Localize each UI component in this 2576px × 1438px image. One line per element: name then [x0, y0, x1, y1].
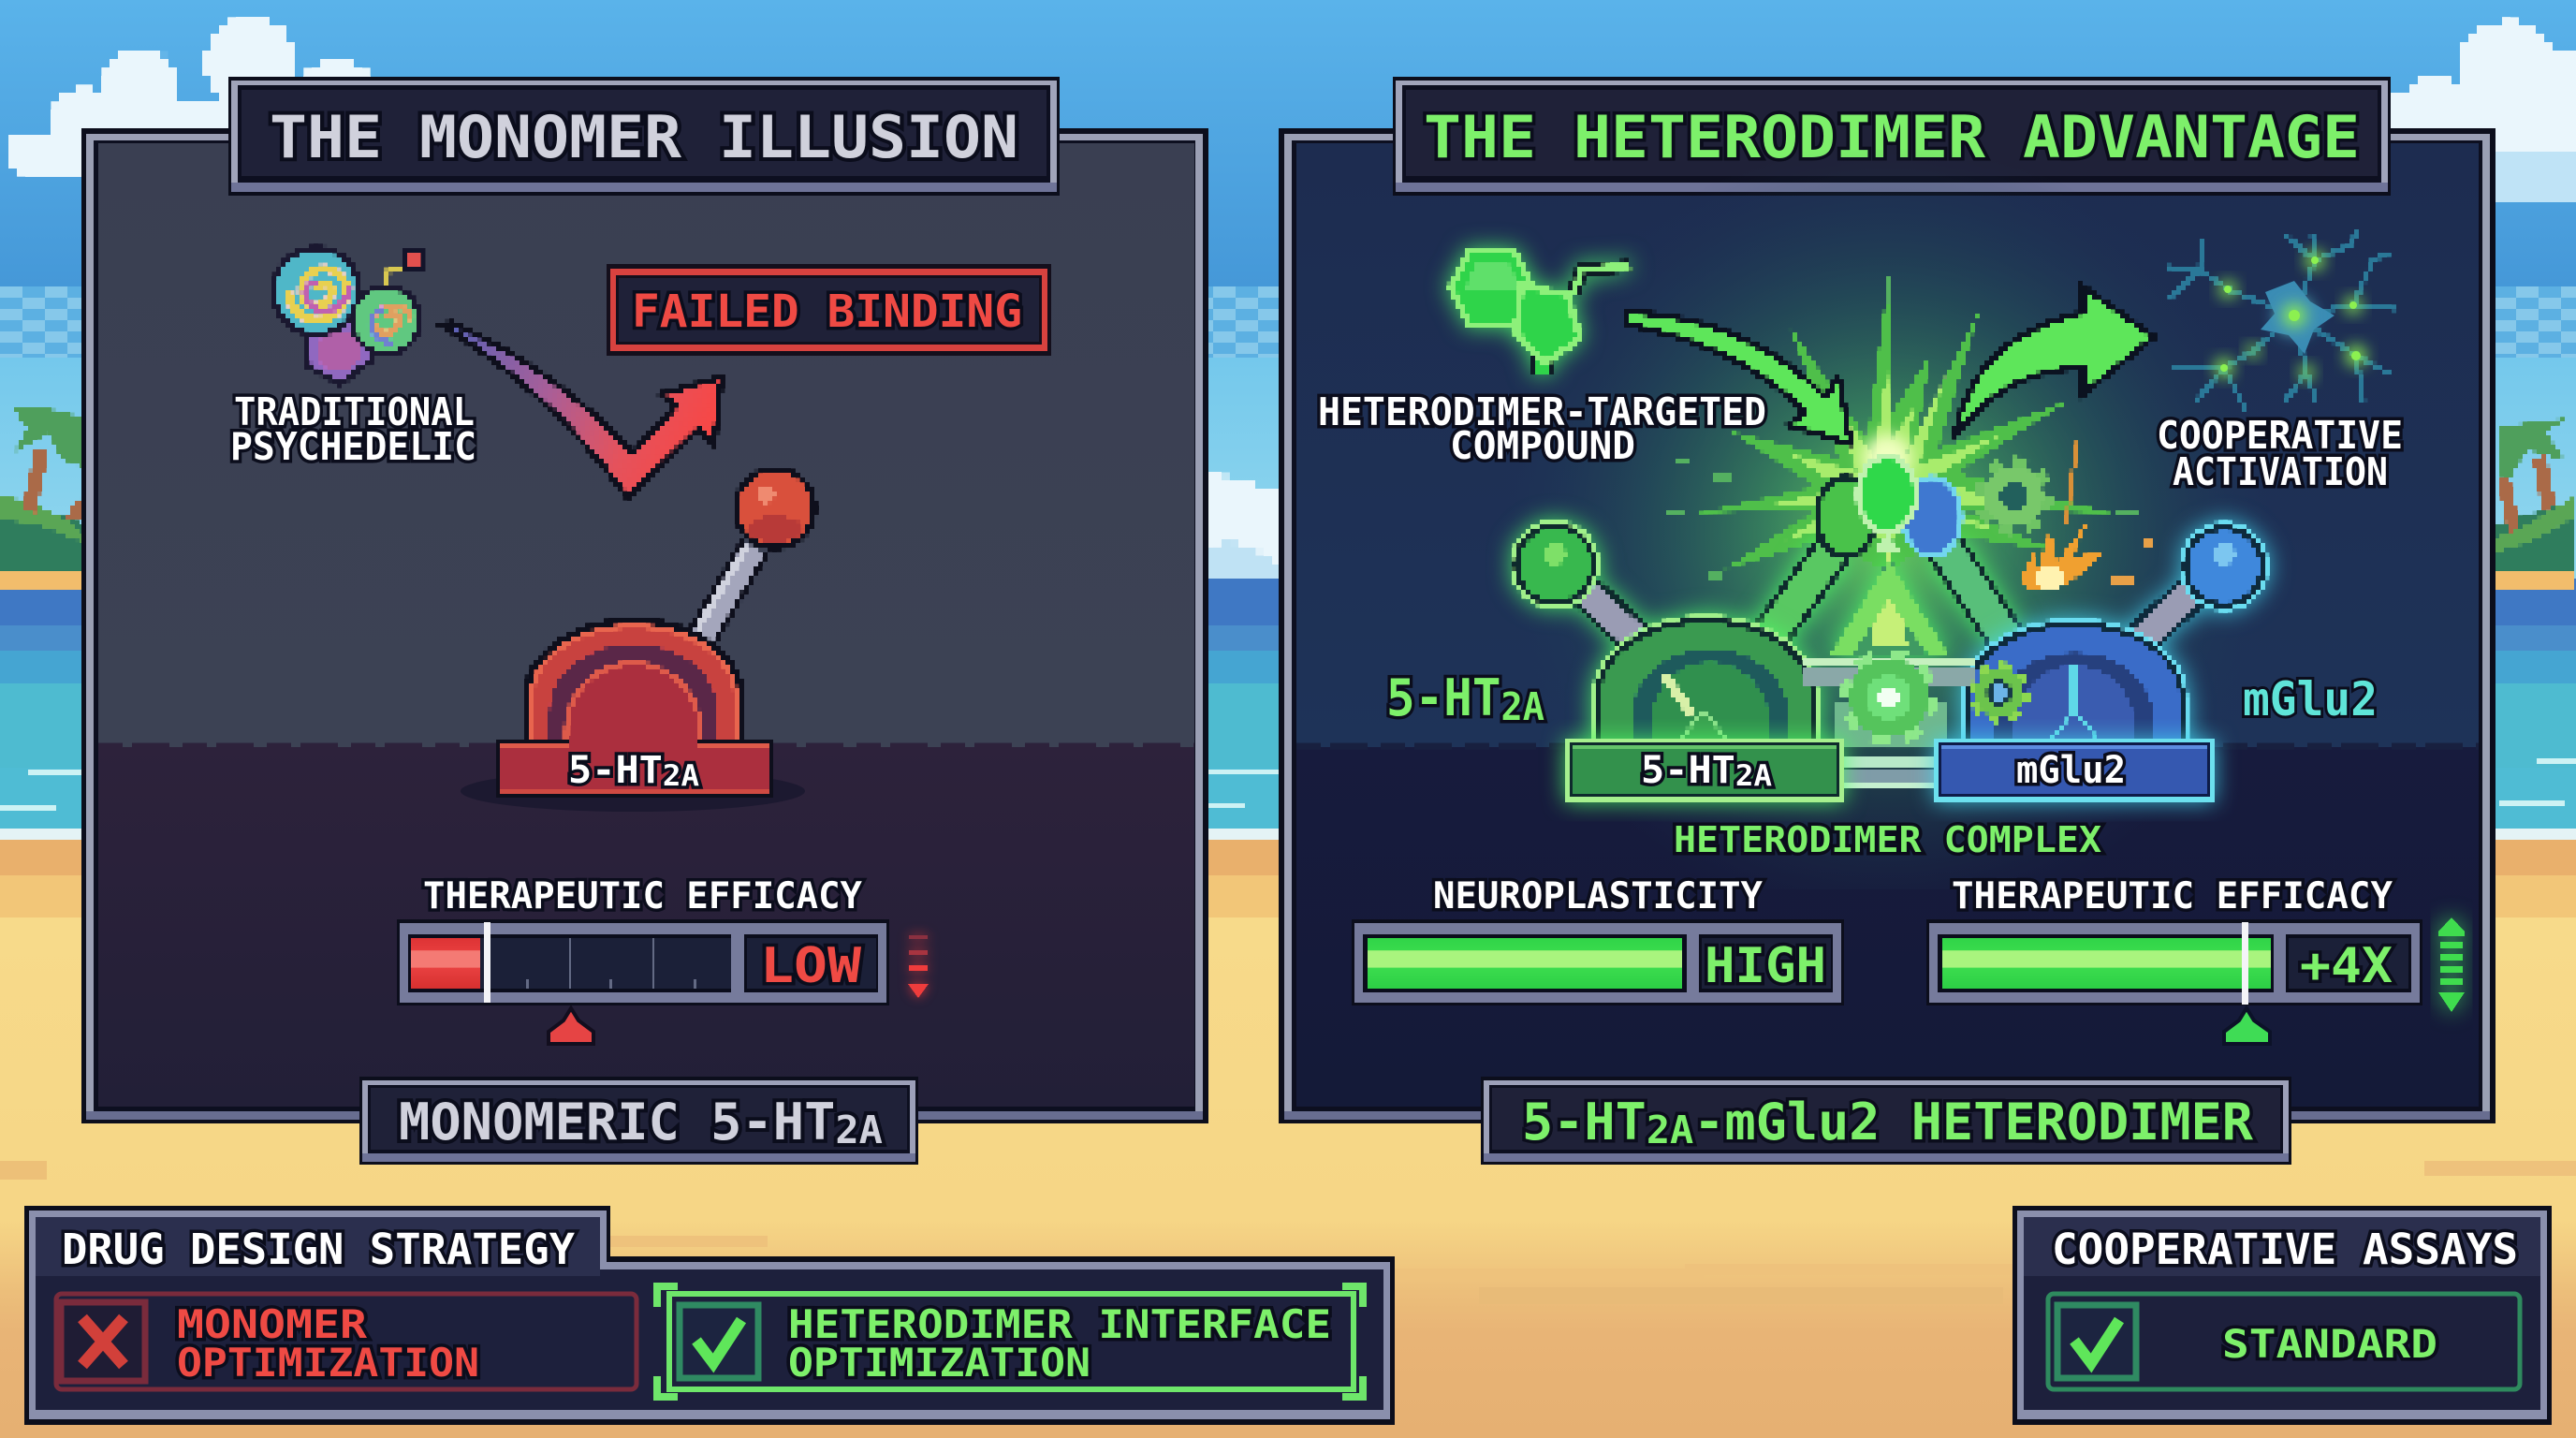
- panel frame: [1279, 128, 2496, 1123]
- panel footer: 5-HT2A-mGlu2 heterodimer: 2A: [1647, 1108, 1694, 1152]
- binding site: [1817, 457, 2047, 556]
- icon: red lever, 5-HT2A receptor: [461, 469, 814, 812]
- sand: [0, 840, 2576, 1438]
- right lever blue: [1967, 523, 2267, 744]
- marker: green pointer: [2224, 1008, 2270, 1044]
- gauge value: LOW: [760, 938, 862, 994]
- panel footer: monomeric 5-HT2A: MONOMERIC 5-HT: [399, 1093, 825, 1152]
- panel: drug design strategy: [24, 1206, 1395, 1425]
- option text: MONOMER: [177, 1301, 368, 1347]
- panel title: the monomer illusion: THE MONOMER ILLUSION: [270, 103, 1018, 171]
- option: standard: [2048, 1294, 2520, 1389]
- indicator: rising green dashes: [2438, 917, 2465, 1012]
- panel: the heterodimer advantage: [1279, 77, 2496, 1165]
- base text: mGlu2: mGlu2: [2016, 749, 2126, 792]
- sky: [0, 0, 2576, 582]
- panel footer: 5-HT2A-mGlu2 heterodimer: 5-HT: [1522, 1093, 1644, 1152]
- gauge: high neuroplasticity: [1352, 919, 1844, 1005]
- gauge value: +4X: [2300, 938, 2393, 994]
- option text: [788, 1301, 1331, 1386]
- arrow: deflected binding attempt: [442, 323, 722, 498]
- option text: [177, 1301, 479, 1386]
- option text: OPTIMIZATION: [177, 1340, 479, 1386]
- icon: activated neuron: [2167, 229, 2396, 412]
- label: mGlu2 right: mGlu2: [2243, 672, 2378, 726]
- gauge value: HIGH: [1705, 938, 1826, 994]
- glow: central activation: [1494, 150, 2280, 889]
- clouds: [7, 17, 2576, 579]
- option: monomer optimization (rejected): [56, 1294, 637, 1389]
- panel footer: 5-HT2A-mGlu2 heterodimer: -mGlu2 HETERODIMER: [1693, 1093, 2253, 1152]
- icon: heterodimer-targeted compound molecule: [1451, 251, 1631, 374]
- base: mGlu2: [1934, 739, 2215, 802]
- neuron body: [2261, 281, 2334, 354]
- islands and palm trees: [0, 406, 2576, 592]
- corner brackets: [657, 1286, 1363, 1397]
- base text: 5-HT2A: 2A: [1735, 759, 1772, 793]
- option text: OPTIMIZATION: [788, 1340, 1090, 1386]
- lever label: 5-HT: [568, 749, 658, 792]
- small gear: [1973, 667, 2026, 719]
- panel: cooperative assays: [2012, 1206, 2552, 1425]
- panel: the monomer illusion: [81, 77, 1208, 1165]
- panel title: the heterodimer advantage: [1393, 77, 2391, 196]
- gauge label: neuroplasticity: NEUROPLASTICITY: [1433, 875, 1764, 917]
- gauge label: therapeutic efficacy: THERAPEUTIC EFFICACY: [1952, 875, 2393, 917]
- lever label: 2A: [663, 759, 699, 793]
- sea: [0, 579, 2576, 844]
- callout: failed binding: [607, 264, 1051, 356]
- gauge: low therapeutic efficacy: [397, 919, 889, 1005]
- center gear: [1848, 656, 1930, 739]
- label: cooperative activation: COOPERATIVE: [2157, 413, 2403, 458]
- left lever green: [1512, 521, 1813, 744]
- arrow: activation output: [1954, 286, 2154, 437]
- label: traditional psychedelic: PSYCHEDELIC: [230, 424, 476, 469]
- label: heterodimer-targeted compound: COMPOUND: [1450, 423, 1635, 468]
- linkage legs: [1769, 548, 2005, 655]
- label: 5-HT2A left: 5-HT: [1386, 668, 1508, 727]
- label: traditional psychedelic: [230, 389, 476, 469]
- icon: traditional psychedelic swirl molecule: [273, 248, 421, 384]
- label: heterodimer-targeted compound: [1318, 389, 1766, 468]
- callout: failed binding: FAILED BINDING: [632, 286, 1022, 338]
- connector bars: [1803, 658, 1975, 788]
- base: 5-HT2A: [1565, 739, 1844, 802]
- option text: HETERODIMER INTERFACE: [788, 1301, 1331, 1347]
- marker: red pointer: [549, 1008, 593, 1044]
- arrow: compound into binding site: [1625, 312, 1851, 444]
- panel footer: monomeric 5-HT2A: [359, 1077, 918, 1165]
- burst core: [1863, 434, 1911, 483]
- icon: green check: [2057, 1305, 2136, 1378]
- panel frame: [2012, 1206, 2552, 1425]
- neuron nodes: [2215, 251, 2366, 380]
- spark: [2022, 440, 2155, 592]
- label: cooperative activation: [2157, 413, 2403, 494]
- heading: cooperative assays: COOPERATIVE ASSAYS: [2052, 1225, 2518, 1274]
- option: heterodimer interface optimization (selected): [657, 1286, 1363, 1397]
- heading: drug design strategy: DRUG DESIGN STRATEGY: [62, 1225, 575, 1274]
- icon: green check: [680, 1305, 758, 1378]
- diagram: 5-HT2A and mGlu2 heterodimer complex: [1512, 440, 2267, 802]
- label: heterodimer complex: HETERODIMER COMPLEX: [1674, 819, 2101, 860]
- gauge label: therapeutic efficacy: THERAPEUTIC EFFICACY: [423, 875, 863, 917]
- label: cooperative activation: ACTIVATION: [2173, 449, 2388, 494]
- icon: red cross: [61, 1302, 145, 1381]
- panel title: the monomer illusion: [228, 77, 1060, 196]
- label: traditional psychedelic: TRADITIONAL: [234, 389, 475, 434]
- lever shadow: [461, 770, 805, 812]
- base text: 5-HT2A: 5-HT: [1641, 749, 1731, 792]
- panel title: the heterodimer advantage: THE HETERODIMER ADVANTAGE: [1424, 103, 2360, 171]
- label: 5-HT2A left: 2A: [1500, 684, 1544, 729]
- panel frame: [81, 128, 1208, 1123]
- indicator: falling red dashes: [908, 935, 929, 998]
- option text: STANDARD: [2222, 1321, 2437, 1367]
- label: heterodimer-targeted compound: HETERODIMER-TARGETED: [1318, 389, 1766, 434]
- gauge: plus 4x therapeutic efficacy: [1926, 919, 2422, 1005]
- panel frame and tab: [24, 1206, 1395, 1425]
- burst: green energy rays: [1664, 274, 2138, 579]
- panel footer: monomeric 5-HT2A: 2A: [835, 1108, 883, 1152]
- panel footer: 5-HT2A-mGlu2 heterodimer: [1481, 1077, 2291, 1165]
